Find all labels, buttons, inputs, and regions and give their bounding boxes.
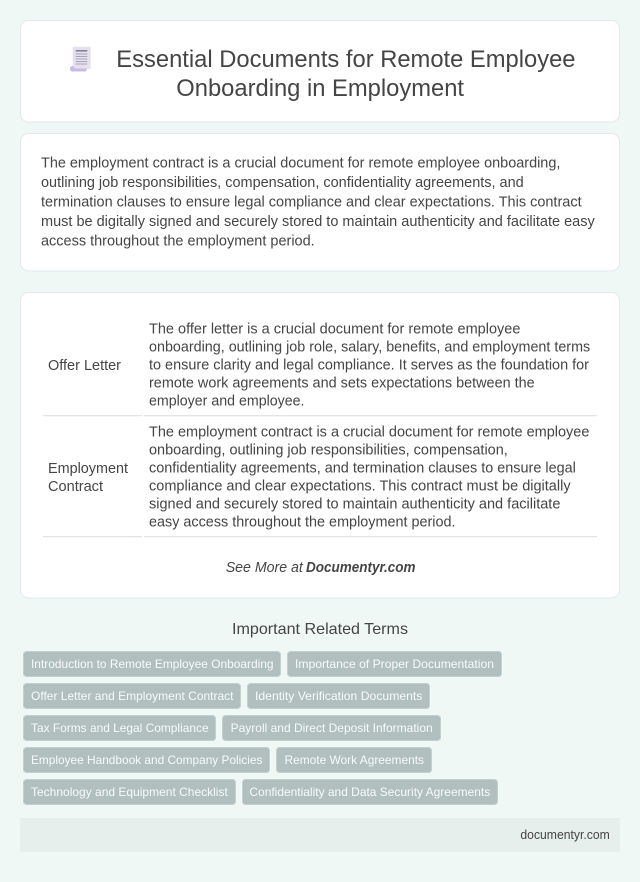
table row: offer letter: to ensure clarity and legal compliance. It serves as the foundation for bbox=[149, 358, 589, 374]
chip bbox=[288, 652, 502, 676]
table row: offer letter: remote work agreements and sets expectations between the bbox=[149, 376, 535, 392]
chip bbox=[24, 684, 240, 708]
text block: employment contract summary: outlining job responsibilities, compensation, confidentiality agreements, and bbox=[41, 175, 524, 191]
heading: title bbox=[116, 46, 576, 102]
chip: Identity Verification Documents bbox=[255, 689, 422, 703]
related terms chips bbox=[24, 652, 502, 804]
chip bbox=[24, 716, 216, 740]
table row: offer letter: The offer letter is a crucial document for remote employee bbox=[149, 322, 520, 338]
chip bbox=[242, 780, 498, 804]
table row: employment contract: compliance and clear expectations. This contract must be digitally bbox=[149, 479, 571, 495]
link: see more: See More at bbox=[226, 560, 304, 576]
table row: offer letter: onboarding, outlining job role, salary, benefits, and employment terms bbox=[149, 340, 590, 356]
text block: employment contract summary: The employment contract is a crucial document for remote employee onboarding, bbox=[41, 156, 560, 172]
chip bbox=[276, 748, 432, 772]
icon: document scroll bbox=[70, 47, 91, 72]
chip bbox=[24, 780, 236, 804]
link: see more bbox=[226, 560, 416, 576]
table row: offer letter bbox=[43, 322, 597, 416]
table row: employment contract bbox=[43, 425, 597, 537]
chip: Employee Handbook and Company Policies bbox=[31, 753, 262, 767]
footer bar: documentyr.com bbox=[520, 828, 610, 842]
chip bbox=[24, 748, 270, 772]
chip: Introduction to Remote Employee Onboarding bbox=[31, 657, 274, 671]
table row: employment contract: Contract bbox=[48, 479, 103, 495]
table row: employment contract: Employment bbox=[48, 461, 128, 477]
table row: employment contract: The employment contract is a crucial document for remote employee bbox=[149, 425, 589, 441]
table row: offer letter: Offer Letter bbox=[48, 358, 121, 374]
chip: Tax Forms and Legal Compliance bbox=[31, 721, 209, 735]
chip bbox=[248, 684, 430, 708]
chip bbox=[222, 716, 440, 740]
chip: Payroll and Direct Deposit Information bbox=[231, 721, 433, 735]
chip: Remote Work Agreements bbox=[284, 753, 424, 767]
chip bbox=[24, 652, 280, 676]
table row: employment contract: signed and securely stored to maintain authenticity and facilitate bbox=[149, 497, 560, 513]
heading: title: Onboarding in Employment bbox=[176, 75, 464, 102]
table row: employment contract: confidentiality agreements, and termination clauses to ensure legal bbox=[149, 461, 576, 477]
chip: Confidentiality and Data Security Agreements bbox=[249, 785, 490, 799]
table row: employment contract: easy access throughout the employment period. bbox=[149, 515, 456, 531]
chip: Offer Letter and Employment Contract bbox=[31, 689, 234, 703]
link: see more: Documentyr.com bbox=[306, 560, 416, 576]
chip: Importance of Proper Documentation bbox=[295, 657, 494, 671]
table row: offer letter: employer and employee. bbox=[149, 394, 304, 410]
text block: employment contract summary: must be digitally signed and securely stored to maintain authenticity and facilitate easy bbox=[41, 214, 595, 230]
panel: title card bbox=[20, 20, 620, 122]
text block: employment contract summary: termination clauses to ensure legal compliance and clear expectations. This contract bbox=[41, 195, 582, 211]
footer bar bbox=[20, 818, 620, 852]
heading: important related terms: Important Related Terms bbox=[232, 621, 408, 638]
chip: Technology and Equipment Checklist bbox=[31, 785, 228, 799]
text block: employment contract summary bbox=[41, 156, 595, 250]
panel: documents table bbox=[20, 292, 620, 598]
heading: title: Essential Documents for Remote Employee bbox=[116, 46, 576, 73]
text block: employment contract summary: access throughout the employment period. bbox=[41, 234, 315, 250]
table row: employment contract: onboarding, outlining job responsibilities, compensation, bbox=[149, 443, 508, 459]
panel: introduction paragraph bbox=[20, 134, 620, 271]
